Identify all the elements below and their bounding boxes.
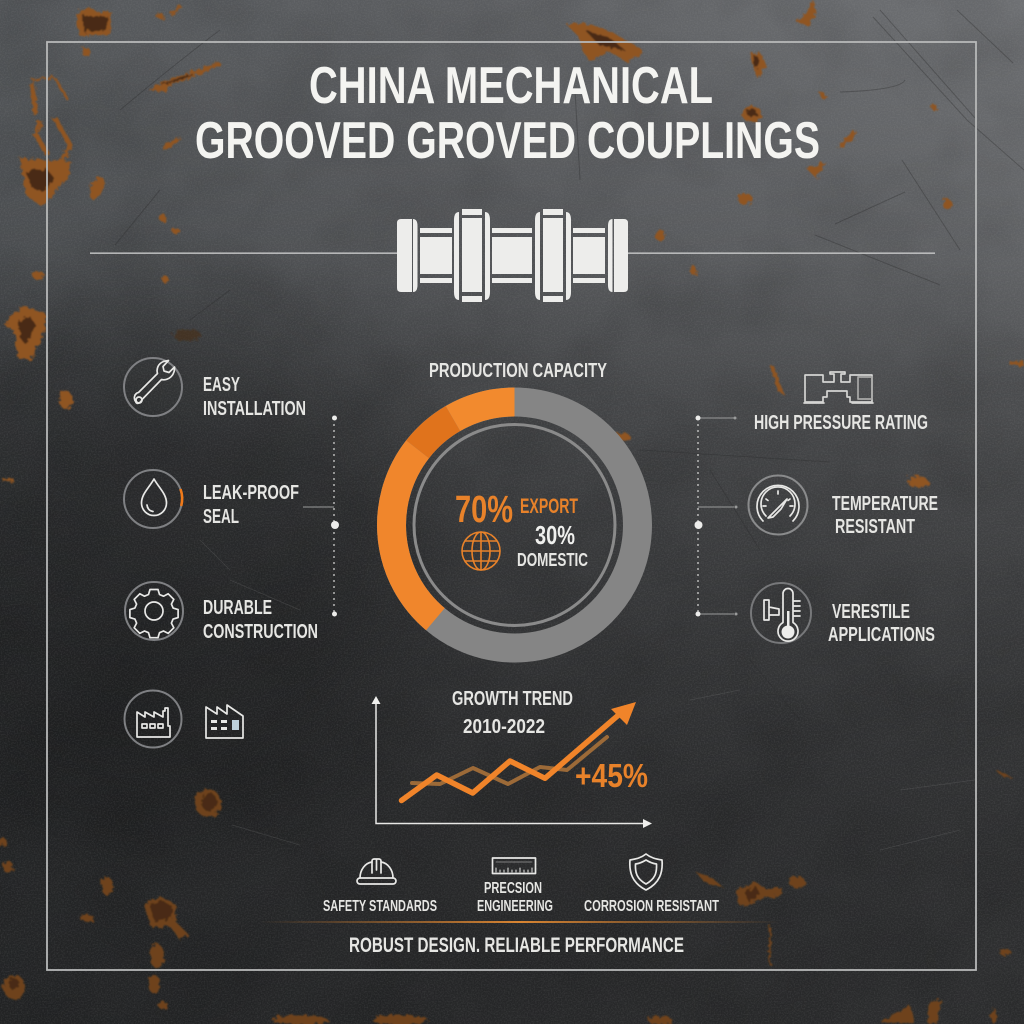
heading: growth trend: 2010-2022 xyxy=(463,716,545,738)
label: easy installation: EASY xyxy=(203,374,240,396)
title: GROOVED GROVED COUPLINGS xyxy=(195,112,820,170)
badge: corrosion resistant: CORROSION RESISTANT xyxy=(584,898,719,915)
secondary trend line xyxy=(412,737,607,784)
badge: safety standards: SAFETY STANDARDS xyxy=(323,898,437,915)
title: CHINA MECHANICAL xyxy=(309,57,713,115)
label: leak-proof seal: SEAL xyxy=(203,506,239,528)
label: high pressure rating: HIGH PRESSURE RATING xyxy=(754,412,928,434)
badge: precision engineering: PRECSION xyxy=(484,880,542,897)
label: easy installation: INSTALLATION xyxy=(203,398,306,420)
badge: corrosion resistant xyxy=(584,854,719,915)
connector: left dotted timeline xyxy=(303,416,339,616)
connector: right dotted timeline xyxy=(694,416,738,616)
label: versatile applications xyxy=(828,601,935,646)
label: durable construction: DURABLE xyxy=(203,597,272,619)
label: versatile applications: VERESTILE xyxy=(832,601,910,623)
title xyxy=(195,57,820,170)
panel: right features xyxy=(694,372,938,646)
label: temperature resistant xyxy=(832,493,938,538)
heading: growth trend xyxy=(452,688,573,738)
label: versatile applications: APPLICATIONS xyxy=(828,624,935,646)
panel: growth trend chart xyxy=(372,688,652,828)
stat: +45%: +45% xyxy=(575,757,648,794)
panel: production capacity donut xyxy=(392,360,638,648)
icon: factory xyxy=(206,705,243,738)
label: temperature resistant: RESISTANT xyxy=(835,516,915,538)
icon: water drop xyxy=(124,470,182,528)
panel: bottom badges xyxy=(323,854,719,915)
icon: grooved coupling with horizontal rule xyxy=(90,209,935,302)
panel: left features xyxy=(124,358,339,748)
donut chart xyxy=(392,402,638,648)
icon: globe xyxy=(462,532,500,570)
stat: 30% domestic: DOMESTIC xyxy=(517,550,588,570)
label: easy installation xyxy=(203,374,306,420)
label: leak-proof seal: LEAK-PROOF xyxy=(203,482,299,504)
chart axes xyxy=(372,696,652,828)
icon: wrench xyxy=(124,358,182,416)
label: leak-proof seal xyxy=(203,482,299,528)
stat: 70% export: 70% xyxy=(455,489,513,531)
stat: 70% export: EXPORT xyxy=(520,495,578,518)
heading: production capacity: PRODUCTION CAPACITY xyxy=(429,360,607,382)
stat: 30% domestic xyxy=(517,520,588,570)
tagline: ROBUST DESIGN. RELIABLE PERFORMANCE xyxy=(349,934,684,957)
divider rule xyxy=(260,921,780,923)
label: durable construction xyxy=(203,597,318,643)
badge: precision engineering: ENGINEERING xyxy=(477,898,553,915)
stat: 30% domestic: 30% xyxy=(535,520,575,550)
icon: gear xyxy=(125,582,183,640)
badge: safety standards xyxy=(323,859,437,915)
icon: pressure gauge xyxy=(748,476,808,534)
stat: 70% export xyxy=(455,489,578,531)
icon: factory in ring xyxy=(124,690,182,748)
label: durable construction: CONSTRUCTION xyxy=(203,621,318,643)
icon: thermometer with valve xyxy=(751,583,811,643)
growth arrow xyxy=(402,702,636,800)
badge: precision engineering xyxy=(477,858,553,915)
heading: growth trend: GROWTH TREND xyxy=(452,688,573,710)
icon: pipe fitting xyxy=(804,372,873,403)
label: temperature resistant: TEMPERATURE xyxy=(832,493,938,515)
